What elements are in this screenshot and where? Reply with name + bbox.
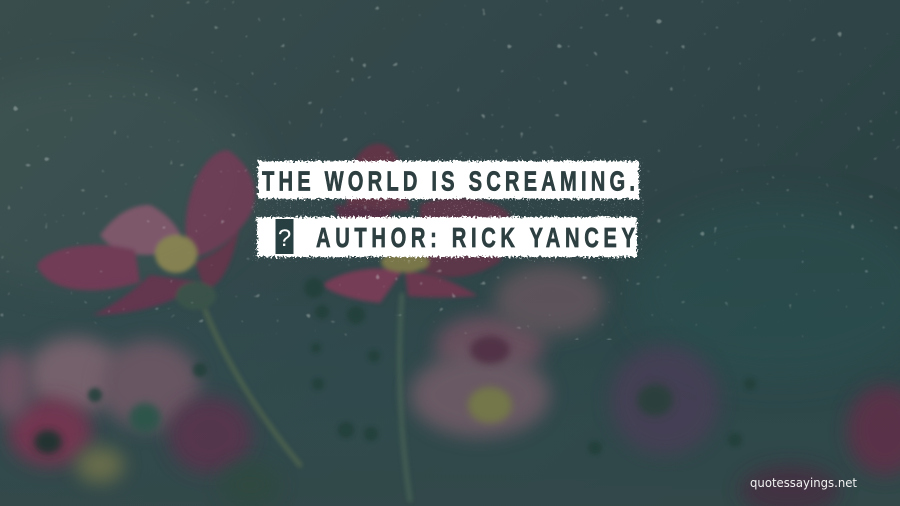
bokeh speckles (0, 0, 900, 340)
quote line background (258, 161, 639, 199)
dark buds (88, 278, 756, 455)
author line background (257, 217, 637, 257)
quote text: THE WORLD IS SCREAMING. (262, 166, 635, 197)
flower stems (205, 295, 410, 500)
left pink flower (37, 150, 255, 315)
missing glyph box (275, 218, 294, 254)
site watermark: quotessayings.net (750, 475, 857, 490)
author text: AUTHOR: RICK YANCEY (316, 223, 635, 254)
centre pink flower (322, 144, 510, 303)
blurred lower flowers (0, 265, 900, 506)
missing glyph box: ? (278, 225, 291, 252)
white grit around text bars (252, 156, 644, 262)
